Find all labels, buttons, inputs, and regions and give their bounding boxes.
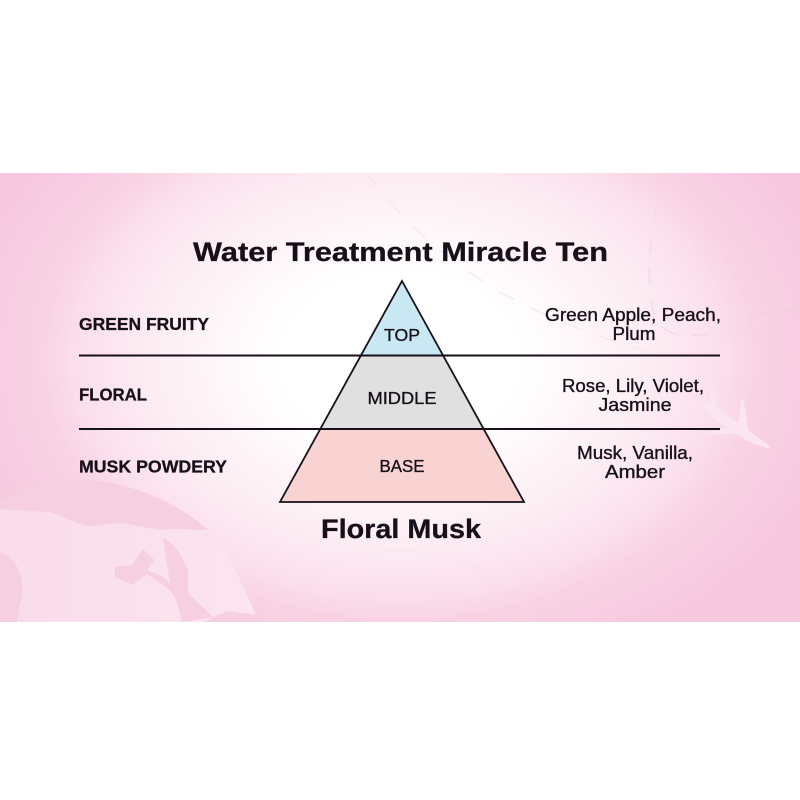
pyramid caption: Floral Musk [321, 514, 482, 544]
divider: upper row line [79, 354, 720, 356]
pyramid outline [280, 281, 524, 502]
right notes: base [577, 443, 693, 482]
right notes: base: Musk, Vanilla, [577, 443, 693, 463]
pyramid tier: middle [321, 356, 483, 429]
pyramid chart [280, 281, 524, 502]
right notes: middle [562, 376, 704, 415]
icon: airplane [703, 388, 770, 449]
right notes: base: Amber [605, 462, 665, 482]
pyramid tier: top [362, 281, 442, 356]
right notes: top [545, 305, 721, 344]
right notes: middle: Jasmine [598, 395, 672, 415]
infographic canvas [0, 173, 800, 622]
panel: pink background band [0, 173, 800, 622]
globe decoration [0, 480, 259, 622]
left label: floral: FLORAL [79, 384, 147, 404]
left label: musk powdery: MUSK POWDERY [79, 456, 227, 476]
right notes: middle: Rose, Lily, Violet, [562, 376, 704, 396]
label: BASE: BASE [380, 456, 424, 476]
pyramid tier: base [280, 429, 524, 502]
label: TOP: TOP [384, 325, 420, 345]
right notes: top: Plum [612, 324, 656, 344]
divider: lower row line [79, 428, 720, 430]
left label: green fruity: GREEN FRUITY [79, 314, 209, 334]
title: Water Treatment Miracle Ten [193, 237, 608, 267]
label: MIDDLE: MIDDLE [368, 388, 436, 408]
right notes: top: Green Apple, Peach, [545, 305, 721, 325]
dashed flight path decoration [366, 173, 790, 358]
